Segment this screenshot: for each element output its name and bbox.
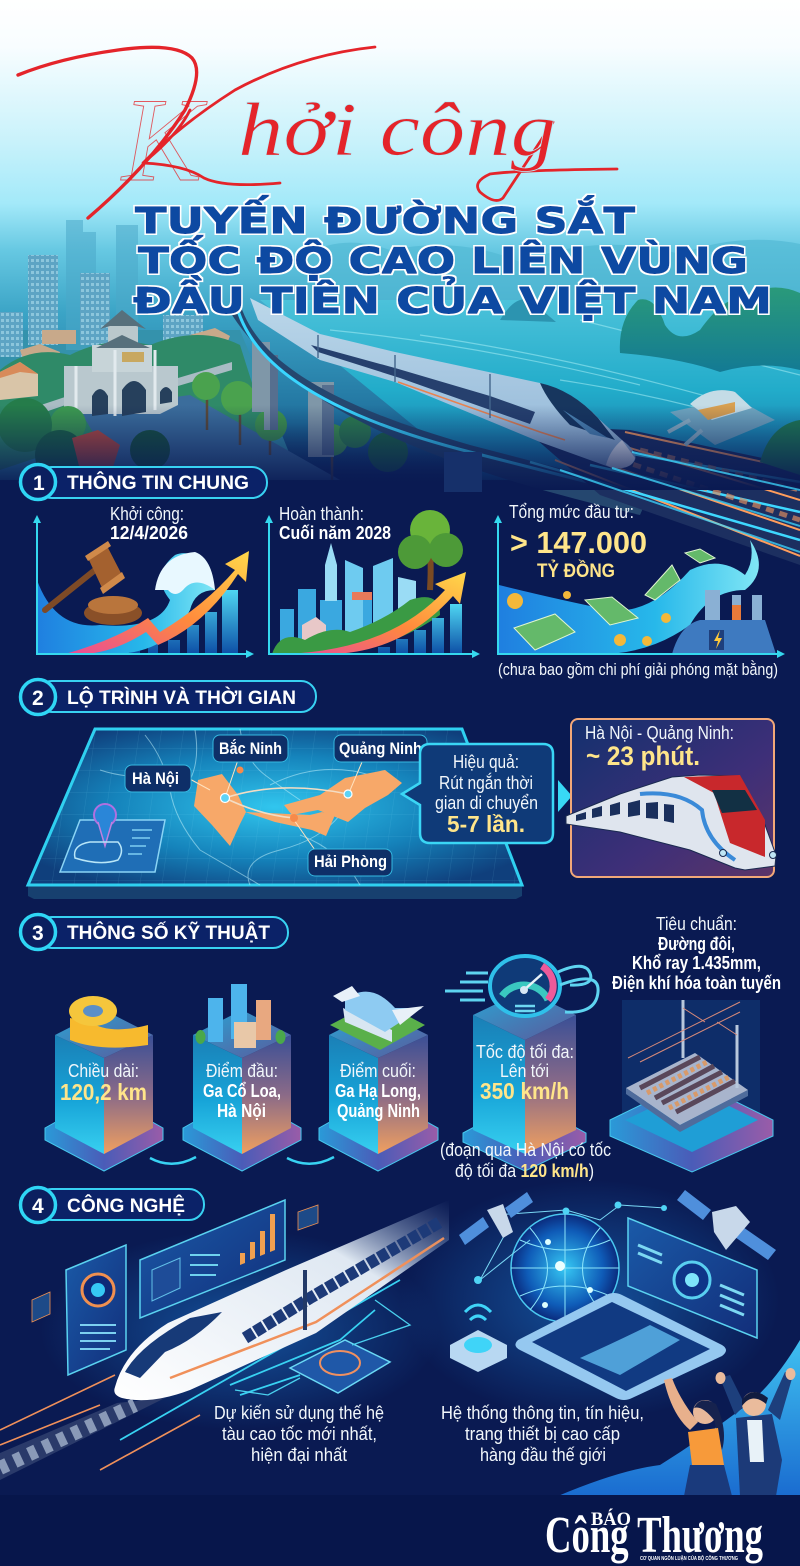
place label: Hà Nội (125, 765, 191, 792)
karst islands (620, 288, 800, 372)
route lines (225, 788, 348, 818)
water ripples (330, 320, 800, 425)
track (0, 1398, 165, 1480)
decorative K swash stem (18, 47, 197, 218)
track bundle (520, 425, 800, 565)
caption: systems: trang thiết bị cao cấp (465, 1424, 620, 1444)
systems panel (400, 1180, 800, 1496)
place label: Hải Phòng: Hải Phòng (314, 852, 387, 871)
pillar body left (55, 1035, 104, 1154)
decorative g tail swash (478, 122, 617, 200)
place label: Hà Nội: Hà Nội (132, 769, 179, 788)
callout: efficiency (402, 744, 553, 843)
holographic pin panel (60, 804, 165, 872)
pillar: start point (183, 984, 301, 1171)
script title initial: K (120, 73, 208, 206)
pillar top (55, 1010, 153, 1058)
pillar top (193, 1010, 291, 1058)
tower block centre (80, 273, 110, 345)
globe (511, 1214, 619, 1322)
place label: Quảng Ninh: Quảng Ninh (339, 739, 422, 758)
gauge: Khổ ray 1.435mm, (632, 953, 761, 973)
factory (672, 590, 776, 654)
section 3 heading: THÔNG SỐ KỸ THUẬT (67, 922, 270, 944)
caption: systems: hàng đầu thế giới (480, 1445, 606, 1465)
pillar: top speed (445, 956, 598, 1171)
bars (378, 604, 462, 654)
axis arrowheads (33, 515, 254, 658)
pillar base (319, 1095, 438, 1171)
start label: Điểm đầu: (206, 1061, 278, 1081)
axes (269, 520, 476, 654)
gavel (45, 541, 142, 625)
speed label: Tốc độ tối đa: (476, 1042, 574, 1062)
pillar body right (242, 1035, 291, 1154)
coins (507, 591, 671, 646)
panel: route map (28, 729, 522, 899)
pillar top (329, 1010, 428, 1058)
completion date: Cuối năm 2028 (279, 523, 391, 543)
title: Khởi công (18, 47, 617, 218)
start label: Khởi công: (110, 504, 184, 524)
house roof (0, 362, 38, 378)
overhead wires (628, 1002, 740, 1062)
network nodes (474, 1202, 667, 1284)
speed note: (đoạn qua Hà Nội có tốc (440, 1140, 611, 1160)
callout: efficiency: Hiệu quả: (453, 752, 519, 772)
icon: city cluster (196, 984, 286, 1048)
place label: Hải Phòng (308, 849, 392, 876)
front-view train (566, 775, 776, 870)
investment unit: TỶ ĐỒNG (537, 560, 615, 582)
fade into navy (0, 405, 800, 490)
start station: Ga Cổ Loa, (203, 1081, 281, 1101)
map grid (28, 729, 522, 885)
length label: Chiều dài: (68, 1061, 139, 1081)
money river (499, 540, 759, 654)
pillar body right (525, 1015, 576, 1154)
chart: groundbreaking date (33, 504, 254, 658)
growth arrow (285, 572, 466, 654)
catenary poles (683, 1000, 737, 1088)
pillar body left (329, 1035, 378, 1154)
caption: systems (441, 1403, 644, 1465)
curved arrow 1 (150, 1157, 196, 1164)
logo tagline: CƠ QUAN NGÔN LUẬN CỦA BỘ CÔNG THƯƠNG (640, 1554, 738, 1562)
double track: Đường đôi, (658, 934, 735, 954)
section 4 heading: 4 (32, 1195, 44, 1218)
axes (37, 520, 250, 654)
pillar shade (270, 355, 334, 455)
bridge deck (232, 296, 650, 515)
length value: 120,2 km (60, 1079, 147, 1105)
street trees (0, 372, 408, 480)
glow (40, 1230, 440, 1430)
small side panels (32, 1205, 318, 1322)
road (80, 395, 340, 480)
pillar body left (473, 1015, 525, 1154)
section 1 heading: THÔNG TIN CHUNG (67, 472, 249, 494)
investment label: Tổng mức đầu tư: (509, 502, 634, 522)
slab with tracks (626, 1053, 748, 1125)
pillar base (45, 1095, 163, 1171)
celebrating people (664, 1368, 796, 1496)
wall (20, 362, 232, 420)
wave crest foam (155, 552, 215, 594)
investment figure: > 147.000 (510, 525, 647, 560)
start date: 12/4/2026 (110, 523, 188, 543)
section 4 heading (20, 1188, 204, 1222)
small island (500, 299, 556, 322)
house left (0, 362, 38, 400)
bush bottom right (760, 420, 800, 475)
panel: technical specifications (45, 914, 781, 1181)
speed sublabel: Lên tới (500, 1061, 549, 1081)
floating circuit panel (235, 1300, 410, 1395)
decorative K swash arm (143, 47, 375, 185)
glow (400, 1180, 780, 1420)
subtitle line 2: TỐC ĐỘ CAO LIÊN VÙNG (138, 235, 748, 282)
icon: tape measure (69, 996, 148, 1048)
orange node Bac Ninh (236, 766, 244, 774)
pillar base (463, 1100, 586, 1171)
axes (498, 520, 780, 654)
red roof house (72, 430, 120, 470)
floating station (668, 390, 775, 445)
citadel gate (64, 310, 178, 420)
map base slab (28, 885, 522, 899)
pillar body right (378, 1035, 428, 1154)
hero illustration: city, bay and high-speed train (0, 220, 800, 565)
bay water (260, 300, 800, 480)
section 4 heading: CÔNG NGHỆ (67, 1195, 185, 1217)
speed note: độ tối đa 120 km/h) (455, 1161, 594, 1181)
sleepers (647, 1062, 729, 1108)
pillar base (183, 1095, 301, 1171)
tree (398, 510, 463, 590)
section 2 heading: 2 (32, 687, 44, 710)
travel time label: Hà Nội - Quảng Ninh: (585, 723, 734, 743)
end province: Quảng Ninh (337, 1101, 420, 1121)
callout: efficiency: 5-7 lần. (447, 811, 525, 837)
rooftops row (20, 328, 230, 362)
panel: technology (0, 1180, 800, 1496)
platform top glow (625, 1088, 758, 1152)
water splash behind people (558, 1340, 800, 1496)
distant hills (300, 240, 800, 320)
tracks (640, 1057, 735, 1112)
logo small word: BÁO (591, 1508, 631, 1530)
man (716, 1368, 796, 1496)
pillar: length (45, 996, 163, 1171)
station nodes (220, 790, 352, 802)
section 3 heading: 3 (32, 922, 44, 945)
neon lines (0, 1375, 200, 1470)
subtitle: three lines (133, 195, 772, 322)
satellite left (459, 1192, 533, 1245)
rails over fade (560, 452, 800, 552)
green canopy behind gate (0, 335, 270, 470)
high-speed train (250, 298, 635, 468)
bank notes (514, 549, 715, 650)
train panel (0, 1200, 449, 1480)
green hill (272, 597, 440, 654)
network lines (480, 1205, 665, 1280)
panel: general information (33, 502, 785, 679)
left city ground (0, 330, 300, 480)
standards label: Tiêu chuẩn: (656, 914, 737, 934)
chart: total investment (494, 502, 785, 679)
section 3 heading (20, 914, 288, 950)
end label: Điểm cuối: (340, 1061, 416, 1081)
label connectors (188, 754, 365, 850)
subtitle line 3: ĐẦU TIÊN CỦA VIỆT NAM (133, 275, 772, 322)
train body (114, 1200, 449, 1400)
pillar: end point (319, 986, 438, 1171)
start city: Hà Nội (217, 1101, 266, 1121)
icon: speed lines and wind (445, 966, 598, 1012)
axis arrowheads (265, 515, 480, 658)
satellite right (677, 1190, 776, 1260)
wifi router (450, 1305, 507, 1372)
slab front (626, 1088, 748, 1132)
logo: Báo Công Thương (545, 1507, 763, 1564)
section 1 heading (20, 464, 267, 500)
chart dashboard (140, 1200, 285, 1318)
sleepers on track (620, 450, 800, 520)
bridge pillars (252, 342, 334, 457)
track neon and orange lines (555, 432, 800, 556)
platform base (610, 1080, 773, 1172)
orange provinces (194, 770, 402, 846)
low building left (0, 312, 23, 357)
completion label: Hoàn thành: (279, 504, 364, 524)
icon: station building (330, 986, 425, 1050)
script title letters: hởi công (238, 88, 556, 172)
panel: travel time (566, 719, 776, 877)
section 2 heading (20, 680, 316, 714)
growth arrow (65, 551, 249, 654)
footer band (0, 1495, 800, 1566)
callout: efficiency: Rút ngắn thời (439, 772, 533, 793)
tall dashboard (66, 1245, 126, 1375)
arrow to train box (558, 780, 572, 812)
tablet (515, 1293, 726, 1400)
pillar top (473, 990, 576, 1040)
tower block left (28, 255, 58, 345)
chart: completion date (265, 504, 480, 658)
pillar body left (193, 1035, 242, 1154)
train box frame (571, 719, 774, 877)
bars (130, 590, 238, 654)
distant towers (66, 220, 138, 352)
neon blue lines (120, 1280, 400, 1440)
low building right (163, 315, 203, 350)
place label: Bắc Ninh: Bắc Ninh (219, 739, 282, 758)
dark bridge pillar (444, 452, 482, 492)
map surface (28, 729, 522, 885)
caption: trains (214, 1403, 384, 1465)
caption: trains: hiện đại nhất (251, 1445, 347, 1465)
speed value: 350 km/h (480, 1078, 569, 1104)
travel time value: ~ 23 phút. (586, 741, 700, 771)
place label: Quảng Ninh (334, 735, 427, 762)
orange nodes (290, 814, 298, 822)
end station: Ga Hạ Long, (335, 1081, 421, 1101)
standards (610, 914, 781, 1172)
speed note (440, 1140, 611, 1181)
caption: trains: tàu cao tốc mới nhất, (222, 1424, 377, 1444)
icon: speedometer (490, 956, 560, 1016)
pillar body right (104, 1035, 153, 1154)
axis arrowheads (494, 515, 785, 658)
province borders (100, 729, 370, 885)
data panel (628, 1218, 757, 1338)
section 2 heading: LỘ TRÌNH VÀ THỜI GIAN (67, 687, 296, 709)
glass column (622, 1000, 760, 1155)
bridge neon rail (236, 303, 650, 498)
caption: systems: Hệ thống thông tin, tín hiệu, (441, 1403, 644, 1423)
curved arrow 2 (287, 1157, 334, 1164)
sleepers (0, 1405, 135, 1468)
caption: trains: Dự kiến sử dụng thế hệ (214, 1403, 384, 1423)
callout: efficiency: gian di chuyển (435, 793, 538, 813)
section 1 heading: 1 (33, 472, 45, 495)
blue wave (37, 553, 215, 654)
skyline (280, 543, 416, 649)
subtitle line 1: TUYẾN ĐƯỜNG SẮT (135, 195, 636, 242)
woman (664, 1378, 732, 1496)
place label: Bắc Ninh (213, 735, 288, 762)
